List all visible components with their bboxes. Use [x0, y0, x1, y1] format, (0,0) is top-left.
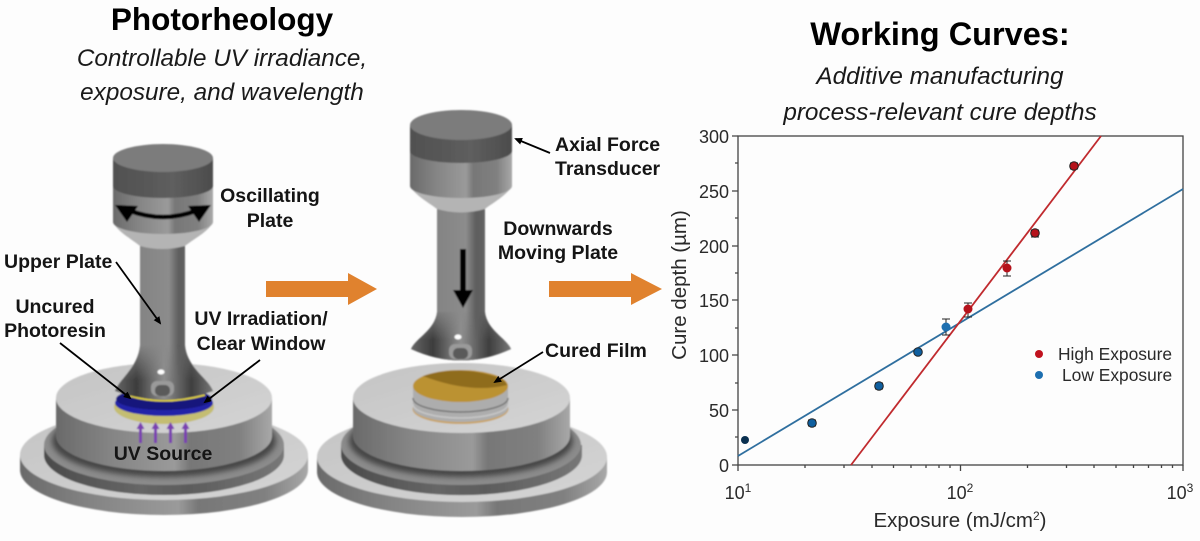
x axis title: )	[1040, 509, 1046, 532]
label: Upper Plate: Upper Plate	[4, 251, 113, 273]
label: Uncured Photoresin: Photoresin	[4, 320, 106, 342]
heading: Working Curves	[782, 16, 1097, 126]
fit line: low exposure	[738, 189, 1183, 456]
heading: Photorheology: Controllable UV irradiance,	[77, 45, 367, 72]
y tick labels: 100	[699, 346, 729, 366]
plot frame and ticks	[732, 136, 1183, 471]
illustration: photorheology rheometer	[20, 144, 308, 515]
heading: Working Curves: Additive manufacturing	[814, 63, 1064, 90]
orange arrow 2	[549, 273, 662, 305]
heading: Working Curves: Working Curves:	[810, 16, 1070, 52]
y tick labels	[699, 127, 729, 476]
oscillating plate head	[113, 144, 213, 249]
axial force transducer head	[410, 110, 512, 212]
label: Uncured Photoresin	[4, 296, 130, 398]
base stage	[20, 363, 308, 515]
label: Upper Plate	[4, 251, 160, 323]
label: Downwards Moving Plate: Downwards	[503, 218, 613, 240]
y tick labels: 50	[709, 401, 729, 421]
y tick labels: 150	[699, 291, 729, 311]
orange arrow 1	[266, 273, 377, 305]
x tick labels: 10	[1167, 483, 1187, 503]
heading: Photorheology: exposure, and wavelength	[80, 79, 364, 106]
x tick labels: 10	[725, 483, 745, 503]
y tick labels: 250	[699, 182, 729, 202]
cured film	[412, 370, 508, 424]
base stage	[317, 363, 607, 517]
y tick labels: 300	[699, 127, 729, 147]
label: Uncured Photoresin: Uncured	[15, 296, 95, 318]
data: low exposure	[741, 319, 950, 444]
label: UV Irradiation / Clear Window	[194, 308, 328, 402]
upper plate: shaft and flare	[115, 240, 213, 400]
label: Oscillating Plate: Oscillating	[220, 185, 320, 207]
label: UV Irradiation / Clear Window: UV Irradiation/	[194, 308, 328, 330]
label: Axial Force Transducer: Axial Force	[555, 134, 660, 156]
x tick labels: 10	[947, 483, 967, 503]
illustration: downward moving plate rheometer	[317, 110, 607, 517]
label: Downwards Moving Plate: Moving Plate	[498, 242, 618, 264]
label: Cured Film	[495, 340, 647, 382]
downward arrow	[453, 249, 473, 308]
x tick labels: 1	[745, 481, 752, 495]
label: Oscillating Plate: Plate	[247, 210, 293, 232]
oscillation arrow	[115, 205, 211, 222]
chart: working curves	[668, 127, 1194, 532]
label: Axial Force Transducer	[516, 134, 661, 180]
fit line: high exposure	[851, 136, 1101, 465]
x axis title: 2	[1033, 509, 1040, 523]
label: Cured Film: Cured Film	[545, 340, 647, 362]
label: UV Source: UV Source	[114, 443, 212, 465]
label: Axial Force Transducer: Transducer	[555, 158, 661, 180]
x tick labels: 2	[967, 481, 974, 495]
data: high exposure	[964, 162, 1078, 317]
x tick labels	[725, 481, 1194, 503]
heading: Photorheology	[77, 1, 367, 106]
y tick labels: 200	[699, 237, 729, 257]
legend: High Exposure	[1058, 344, 1172, 364]
legend: Low Exposure	[1062, 365, 1172, 385]
heading: Photorheology: Photorheology	[111, 1, 334, 37]
x axis title: Exposure (mJ/cm	[874, 509, 1033, 532]
y tick labels: 0	[719, 456, 729, 476]
legend	[1035, 344, 1172, 385]
UV arrows	[136, 422, 190, 443]
x tick labels: 3	[1187, 481, 1194, 495]
label: UV Irradiation / Clear Window: Clear Window	[197, 333, 326, 355]
heading: Working Curves: process-relevant cure depths	[782, 99, 1097, 126]
y axis title: Cure depth (µm)	[668, 210, 691, 360]
sample: uncured photoresin and window	[114, 388, 214, 424]
upper plate: shaft and flare	[411, 200, 511, 360]
